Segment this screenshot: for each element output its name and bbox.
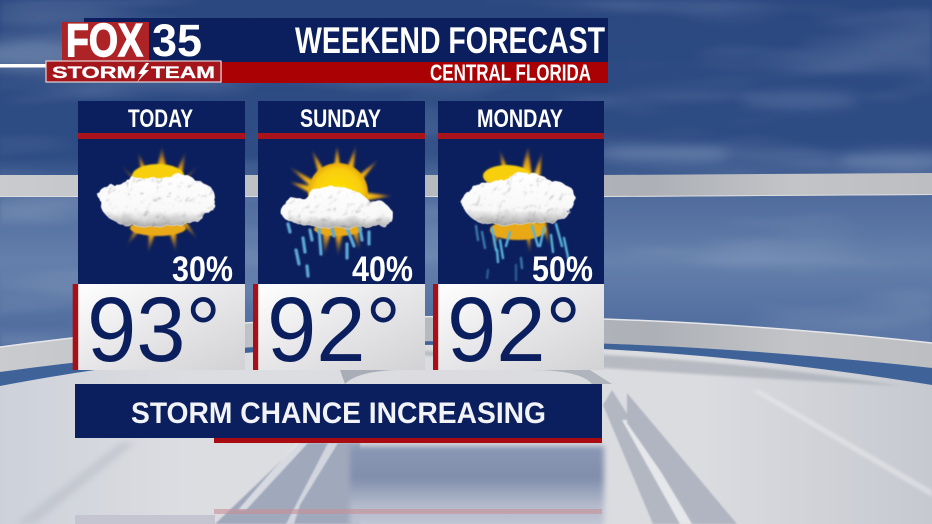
temperature box [433,279,604,381]
banner: storm chance increasing [75,384,602,443]
header: weekend forecast [222,20,608,83]
diagonal set pieces [603,390,737,524]
logo: FOX 35 Storm Team: STORM [52,63,136,82]
upper ring band [0,173,932,197]
icon: partly cloudy sun [100,146,215,254]
logo: FOX 35 Storm Team [0,14,608,82]
logo: FOX 35 Storm Team: TEAM [151,63,215,82]
lower ring band [0,316,932,372]
panel: monday [433,101,604,381]
temperature box [73,279,245,381]
temperature box [253,279,425,381]
rain chance: 40% [352,250,413,289]
logo: FOX 35 Storm Team: 35 [152,15,202,66]
temperature: 93° [87,279,221,381]
title: WEEKEND FORECAST [295,20,605,61]
centre floor well [215,443,360,524]
lower reflection [75,515,215,524]
logo: FOX 35 Storm Team: FOX [66,14,143,66]
panel: sunday [253,101,425,381]
temperature: 92° [447,279,581,381]
subtitle: region: CENTRAL FLORIDA [430,60,591,86]
rain drops [288,224,369,276]
day heading: sunday: SUNDAY [300,105,381,133]
icon: sun, cloud and light rain [279,146,392,276]
rain streaks [476,224,569,280]
temperature: 92° [267,279,401,381]
day heading: monday: MONDAY [477,105,563,133]
rain chance: 30% [172,250,233,289]
panel: today [73,101,245,381]
banner text: STORM CHANCE INCREASING [131,397,546,430]
blue stripe [0,341,932,386]
day heading: today: TODAY [128,105,193,133]
rain chance: 50% [532,250,593,289]
floor [0,330,932,524]
icon: cloud, sun and rain [462,146,575,280]
